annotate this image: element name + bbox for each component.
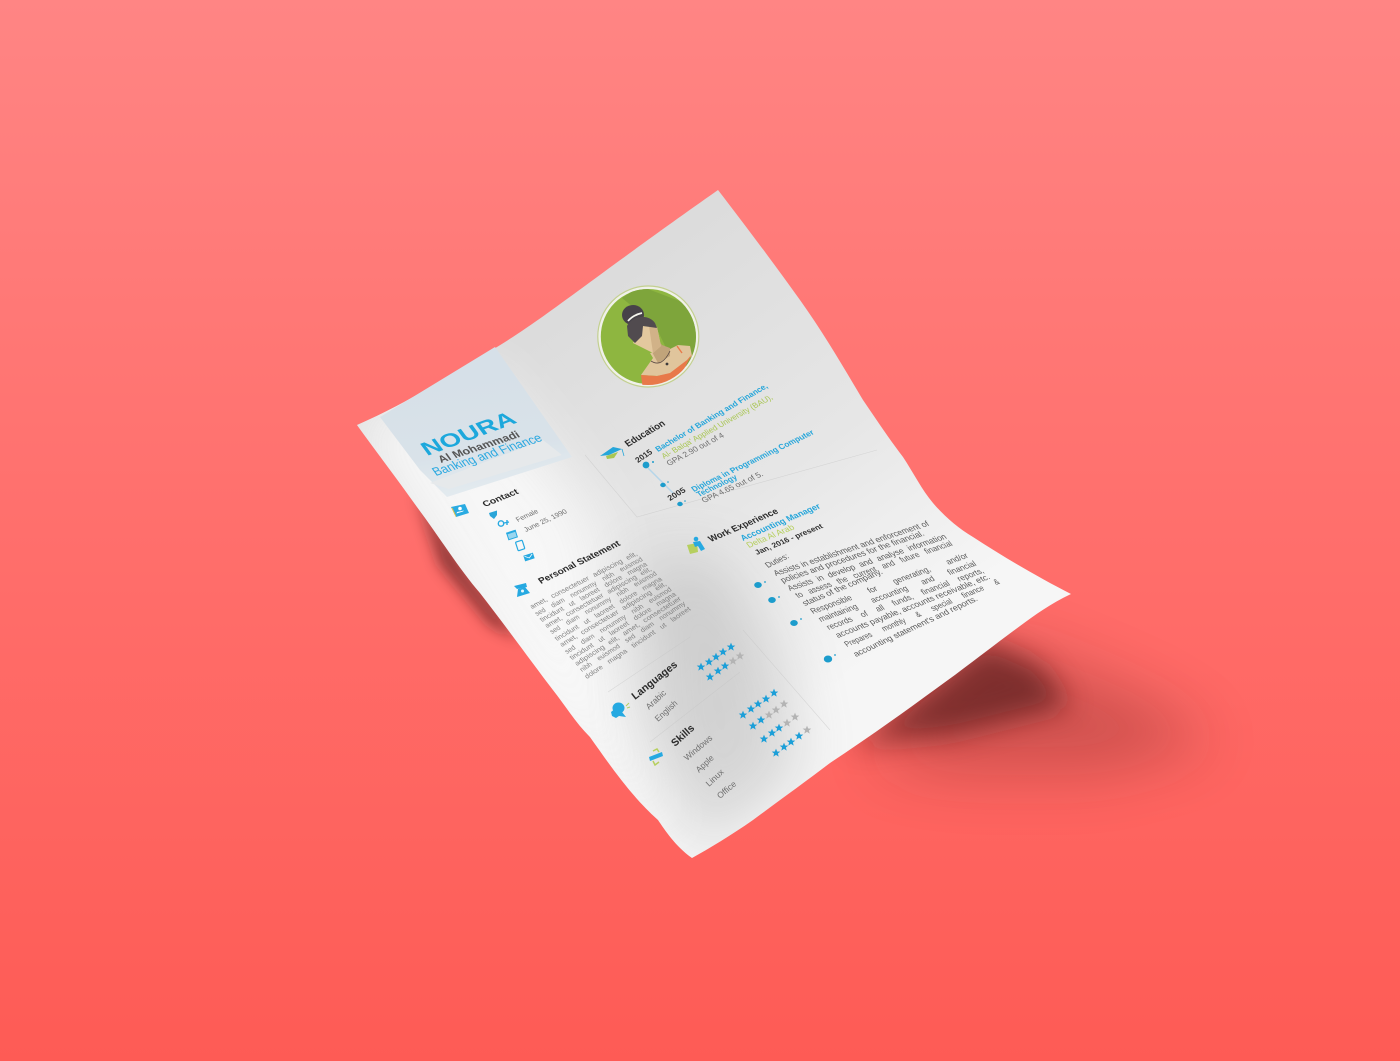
heading: Languages	[629, 659, 680, 702]
year 2015: 2015	[633, 447, 655, 465]
gender value: Female	[514, 508, 540, 524]
icon: phone	[515, 540, 525, 551]
year 2005: 2005	[666, 486, 688, 503]
panel: skills	[649, 689, 811, 801]
heading: Education	[623, 418, 668, 449]
gpa: GPA 2.90 out of 4	[665, 431, 726, 468]
paragraph: amet, consectetuer adipiscing elit,	[559, 581, 668, 649]
panel: work experience	[687, 501, 1002, 662]
skill list	[682, 733, 738, 801]
skill list: Office	[715, 779, 738, 801]
duties	[763, 519, 1002, 659]
paragraph: tincidunt ut laoreet dolore magna	[569, 591, 678, 662]
surname: Al Mohammadi	[436, 429, 523, 465]
language list: Arabic	[644, 687, 668, 711]
duties: records of all funds, financial reports,	[824, 566, 986, 632]
panel: personal statement	[514, 539, 692, 681]
duties: Responsible for generating, and/or	[808, 551, 970, 616]
duties: Prepares monthly & special finance &	[842, 577, 1002, 649]
icon: desk worker	[687, 537, 705, 554]
face	[633, 326, 661, 353]
paragraph: nibh euismod sed diam nonummy	[579, 600, 688, 674]
dates: Jan, 2016 - present	[753, 522, 825, 557]
diploma gpa: GPA 4.65 out of 5.	[700, 470, 765, 505]
panel: languages	[611, 643, 744, 723]
diploma: Diploma in Programming Computer	[689, 428, 817, 494]
duties: maintaining accounting and financial	[816, 559, 978, 624]
skill list: Apple	[694, 753, 716, 774]
icon: graduation cap	[600, 447, 624, 459]
paragraph: adipiscing elit, amet, consectetuer	[574, 595, 684, 668]
heading: Personal Statement	[536, 539, 622, 586]
skill ratings	[739, 689, 811, 757]
paragraph: tincidunt ut laoreet dolore magna	[539, 561, 649, 624]
language ratings	[697, 643, 744, 681]
panel: contact	[451, 487, 569, 561]
portrait	[598, 286, 700, 390]
icon: speaking head	[611, 702, 630, 718]
paragraph: tincidunt ut laoreet dolore magna	[554, 576, 664, 643]
employer: Delta Al Arab	[744, 522, 797, 550]
paper shadow	[415, 490, 1215, 775]
duties: to assess the current and future financial	[793, 539, 955, 600]
icon: gender	[498, 520, 509, 526]
timeline	[643, 461, 686, 506]
paragraph: sed diam nonummy nibh euismod	[534, 556, 645, 618]
necklace	[651, 351, 670, 363]
paper	[357, 190, 1071, 858]
paragraph: dolore magna tincidunt ut laoreet	[584, 606, 692, 681]
language list: English	[653, 698, 680, 723]
icon: address book	[451, 504, 469, 517]
icon: mail	[523, 553, 535, 561]
diploma: Technology	[694, 473, 740, 499]
hair	[622, 305, 644, 325]
icon: graduate person	[514, 583, 530, 597]
heading: Work Experience	[706, 506, 780, 544]
duties: Assists in establishment and enforcement of	[771, 519, 932, 578]
paragraph	[529, 551, 692, 681]
icon: calendar	[506, 530, 518, 540]
icon: location	[489, 510, 497, 519]
duties: accounting statement's and reports.	[851, 594, 980, 659]
heading: Contact	[480, 487, 521, 509]
panel: name block	[380, 347, 572, 497]
duties: status of the company.	[800, 567, 885, 608]
icon: tools	[649, 749, 663, 765]
skill list: Windows	[682, 733, 714, 763]
section rules	[585, 450, 877, 742]
shoulders	[641, 345, 692, 376]
name: NOURA	[417, 408, 521, 460]
university: Al- Balqa' Applied University (BAU),	[660, 393, 775, 461]
skill list: Linux	[704, 766, 726, 788]
paragraph: amet, consectetuer adipiscing elit,	[544, 566, 653, 630]
dress	[641, 354, 692, 385]
heading: Skills	[669, 722, 697, 749]
profession: Banking and Finance	[429, 431, 545, 478]
paper shading	[340, 370, 800, 860]
panel: education	[600, 382, 817, 506]
language list	[644, 687, 680, 723]
paragraph: amet, consectetuer adipiscing elit,	[529, 551, 639, 611]
paragraph: sed diam nonummy nibh euismod	[564, 586, 674, 656]
job title: Accounting Manager	[738, 501, 823, 543]
degree: Bachelor of Banking and Finance,	[653, 382, 770, 454]
duties: Duties:	[763, 552, 791, 570]
duties: accounts payable, accounts receivable, etc.	[833, 572, 992, 640]
bullets	[754, 581, 836, 662]
birth date: June 25, 1990	[522, 508, 569, 534]
resume sheet	[340, 190, 1071, 860]
paragraph: sed diam nonummy nibh euismod	[549, 571, 659, 636]
duties: Assists in develop and analyse information	[785, 532, 949, 593]
duties: policies and procedures for the financial.	[778, 529, 926, 585]
